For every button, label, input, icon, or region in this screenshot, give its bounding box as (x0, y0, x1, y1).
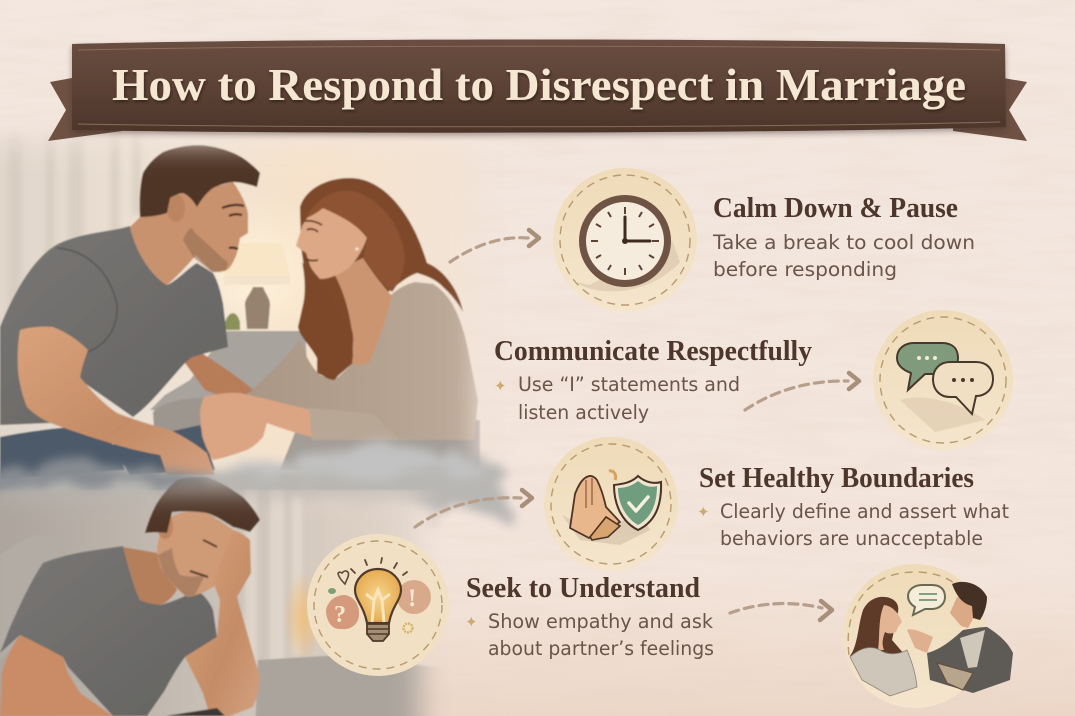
icon: couple conversation badge (843, 564, 1013, 708)
speech blob with question mark (326, 595, 359, 629)
icon: lightbulb badge (307, 534, 449, 676)
step 2 text: communicate: Use “I” statements and (518, 373, 740, 396)
talking woman (850, 597, 917, 696)
man's eye and brow (222, 205, 244, 249)
woman's face (296, 208, 367, 279)
left ribbon tail (48, 78, 122, 141)
dark trousers (165, 708, 225, 716)
banner border lines (78, 46, 1000, 127)
woman's neck and chest (333, 258, 392, 365)
step 2 text: communicate: listen actively (518, 401, 649, 424)
step 2 text: communicate: Communicate Respectfully (494, 335, 812, 367)
woman's cuff (309, 408, 387, 440)
step 4 text: understand (465, 572, 714, 660)
photo: couple talking on sofa (0, 134, 480, 479)
woman's hair back (298, 178, 463, 380)
talking man (907, 582, 1013, 693)
title banner (48, 40, 1027, 141)
man's neck (123, 547, 177, 605)
man's hair (145, 477, 260, 533)
step 4 text: understand: Show empathy and ask (488, 610, 714, 633)
step 3 text: boundaries: behaviors are unacceptable (720, 527, 983, 550)
man's shirt (0, 226, 228, 425)
step 1 text: calm down: Calm Down & Pause (713, 192, 958, 224)
man's closed eye and mouth (190, 540, 217, 577)
man's raised arm and hand (185, 530, 260, 716)
step 3 text: boundaries: ✦ (697, 503, 710, 521)
step 4 text: understand: ✦ (465, 613, 478, 631)
step 4 text: understand: Seek to Understand (466, 572, 700, 604)
step 1 text: calm down: before responding (713, 258, 897, 281)
step 1 text: calm down: Take a break to cool down (712, 231, 975, 254)
banner body (72, 40, 1006, 133)
step 3 text: boundaries (697, 462, 1009, 550)
sofa (150, 331, 480, 470)
title text: How to Respond to Disrespect in Marriage (112, 59, 966, 110)
lamp (224, 243, 290, 330)
man's hair (140, 145, 260, 217)
arrow 1 (450, 230, 539, 262)
man's arm (18, 327, 215, 475)
room background (0, 134, 463, 470)
man's shirt (0, 546, 217, 716)
woman's sweater (248, 282, 478, 440)
man's far forearm (185, 352, 253, 398)
step 2 text: communicate: ✦ (494, 377, 507, 395)
man's neck and face (130, 182, 248, 285)
step 1 text: calm down (712, 192, 975, 281)
arrow 2 (745, 373, 859, 410)
arrow 4 (730, 601, 832, 620)
arrow 3 (415, 490, 532, 527)
right ribbon tail (953, 78, 1027, 141)
sleeve seam (57, 248, 117, 352)
speech bubble (908, 585, 945, 615)
icon: speech bubbles badge (873, 310, 1013, 450)
step 4 text: understand: about partner’s feelings (488, 637, 714, 660)
step 2 text: communicate (494, 335, 812, 424)
small heart and gear (338, 571, 348, 584)
woman's left lock (298, 262, 353, 380)
icon: clock badge (553, 168, 697, 312)
woman's earring (355, 247, 359, 251)
man's ear (158, 518, 173, 539)
man's stubble (158, 548, 205, 597)
photo: man with head in hand (0, 477, 480, 716)
step 3 text: boundaries: Set Healthy Boundaries (699, 462, 974, 494)
woman's hair front (306, 191, 405, 292)
icon: raised hand and shield badge (544, 437, 678, 571)
man's ear (167, 194, 185, 222)
room background (0, 490, 480, 716)
speech blob with question mark: ? (334, 602, 346, 628)
clasped hands (200, 393, 312, 460)
man's stubble (183, 228, 228, 272)
mist band between photos (0, 448, 510, 530)
jeans (0, 425, 215, 480)
speech blob with exclamation mark (397, 580, 431, 614)
man's near arm (0, 635, 113, 716)
woman's eye and brow (305, 221, 322, 261)
step 3 text: boundaries: Clearly define and assert what (720, 500, 1009, 523)
light rays (351, 558, 407, 575)
man's face (157, 512, 238, 597)
speech blob with exclamation mark: ! (408, 585, 416, 612)
bulb (355, 569, 401, 641)
